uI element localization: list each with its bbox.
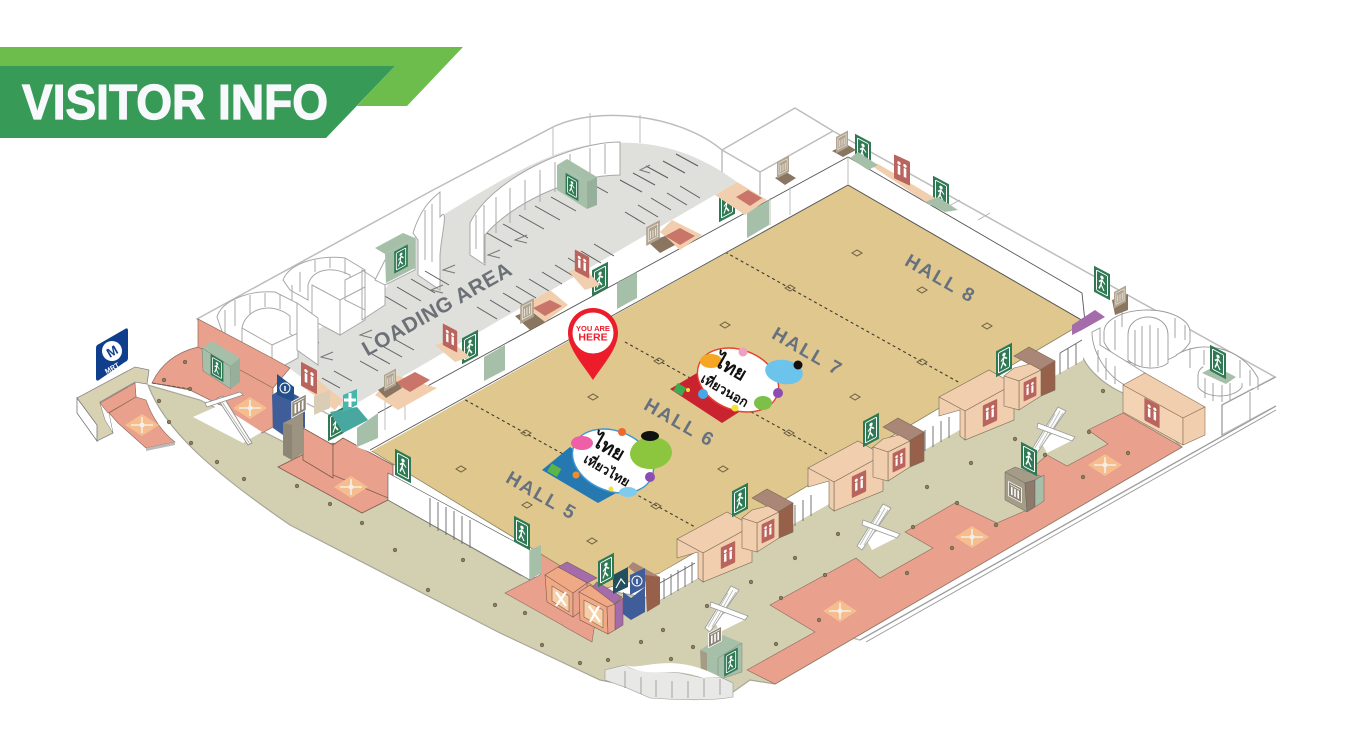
info kiosk	[272, 374, 305, 435]
title: VISITOR INFO	[22, 76, 328, 130]
loading bays	[273, 154, 700, 395]
label: hall 7: HALL 7	[768, 324, 846, 381]
elevator box: right	[1005, 442, 1044, 512]
heading: loading area: LOADING AREA	[358, 258, 516, 361]
restroom group 1	[677, 489, 793, 582]
restroom signs	[301, 154, 910, 394]
purple band	[1072, 310, 1105, 335]
MRT entrance	[77, 367, 175, 451]
label: hall 8: HALL 8	[901, 251, 979, 308]
exit signs	[328, 134, 1226, 587]
exit box: left plaza	[202, 341, 240, 389]
banner	[0, 47, 463, 138]
food box B	[579, 582, 623, 634]
service cluster: left plaza	[272, 374, 368, 460]
label: hall 6: HALL 6	[640, 395, 718, 452]
first aid sign	[330, 389, 368, 433]
poster: hall 6: ไทย	[709, 348, 751, 386]
icon: MRT sign: MRT	[104, 362, 121, 376]
you are here pin: YOU ARE	[576, 324, 610, 333]
lift tower	[283, 394, 306, 460]
restroom group 2	[808, 418, 924, 511]
poster: hall 6: เที่ยวนอก	[698, 369, 752, 410]
pink zone: hall 5 food court corner	[278, 428, 393, 513]
rotunda walls: loading area	[217, 238, 415, 372]
green wall blocks	[357, 200, 769, 447]
label: hall 5: HALL 5	[502, 468, 580, 525]
pink zone: food boxes floor	[505, 550, 600, 642]
right wing: rotundas	[860, 310, 1276, 642]
white corridor wall	[348, 157, 1085, 452]
curved wall: loading ramp	[413, 142, 620, 290]
pink zone: left plaza	[152, 319, 290, 433]
poster: hall 5	[542, 417, 673, 505]
floor markers: directional	[125, 397, 1122, 622]
bottom stairs	[605, 663, 733, 700]
building outline	[197, 108, 1276, 640]
hall floor	[370, 185, 1085, 590]
columns	[157, 360, 1130, 665]
column markers	[456, 250, 992, 544]
hall dividers	[460, 252, 960, 527]
concourse floor	[148, 358, 1182, 692]
pink zone: main right concourse	[747, 413, 1182, 684]
exit box: loading east	[557, 159, 597, 209]
icon: info	[630, 568, 645, 595]
escalators	[193, 392, 1075, 632]
poster: hall 5: ไทย	[587, 428, 629, 466]
restroom group 3	[939, 347, 1055, 440]
icon: MRT sign	[96, 328, 128, 381]
you are here pin	[568, 308, 618, 380]
poster: hall 5: เที่ยวไทย	[581, 450, 633, 490]
icon: MRT sign: M	[104, 342, 121, 361]
you are here pin: HERE	[578, 332, 608, 344]
escalator: right	[1032, 407, 1075, 453]
restroom block: right	[1123, 373, 1205, 445]
elevator box: lower	[700, 626, 742, 680]
escalator: lower	[705, 586, 748, 632]
lift signs	[378, 131, 1128, 398]
hall labels	[502, 251, 979, 525]
restroom floor tiles	[300, 152, 958, 410]
food box A	[545, 562, 597, 617]
exit box: loading west	[375, 233, 415, 283]
escalator: left	[193, 392, 262, 445]
hall walls: windows	[388, 333, 1083, 600]
info kiosk: hall 5 corner	[613, 562, 660, 620]
poster: hall 6	[670, 336, 805, 424]
escalator: middle	[857, 504, 900, 550]
loading area floor	[217, 142, 737, 410]
